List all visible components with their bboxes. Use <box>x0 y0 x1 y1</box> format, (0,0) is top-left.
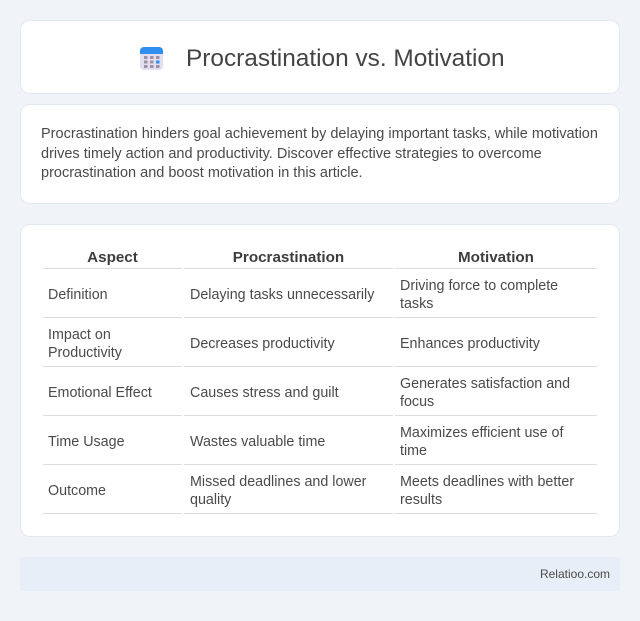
header: motivation: Motivation <box>458 249 534 266</box>
row: impact: Productivity <box>48 345 122 361</box>
intro text: procrastination and boost motivation in this article. <box>41 165 363 181</box>
table: Driving force to complete <box>400 278 558 294</box>
table: Generates satisfaction and <box>400 376 570 392</box>
table: results <box>400 492 442 508</box>
row: time usage: Time Usage <box>48 434 125 450</box>
intro text: drives timely action and productivity. Discover effective strategies to overcome <box>41 146 542 162</box>
table: Maximizes efficient use of <box>400 425 563 441</box>
title: Procrastination vs. Motivation <box>186 45 505 72</box>
icon: calendar <box>140 47 163 70</box>
footer text: Relatioo.com <box>540 567 610 581</box>
header: procrastination: Procrastination <box>233 249 344 266</box>
table: Meets deadlines with better <box>400 474 574 490</box>
table card <box>20 224 620 537</box>
table: Missed deadlines and lower <box>190 474 366 490</box>
table: tasks <box>400 296 433 312</box>
table: Wastes valuable time <box>190 434 325 450</box>
row: impact: Impact on <box>48 327 111 343</box>
table: quality <box>190 492 231 508</box>
header: aspect: Aspect <box>87 249 138 266</box>
table: Decreases productivity <box>190 336 335 352</box>
row: emotional effect: Emotional Effect <box>48 385 152 401</box>
table: Causes stress and guilt <box>190 385 339 401</box>
table: focus <box>400 394 434 410</box>
table: Enhances productivity <box>400 336 540 352</box>
row: outcome: Outcome <box>48 483 106 499</box>
intro card <box>20 104 620 204</box>
footer <box>20 557 620 591</box>
title card <box>20 20 620 94</box>
table: time <box>400 443 427 459</box>
row: impact <box>48 327 122 361</box>
intro text: Procrastination hinders goal achievement by delaying important tasks, while motivation <box>41 126 598 142</box>
intro text <box>41 126 598 181</box>
table: Delaying tasks unnecessarily <box>190 287 374 303</box>
row: definition: Definition <box>48 287 108 303</box>
